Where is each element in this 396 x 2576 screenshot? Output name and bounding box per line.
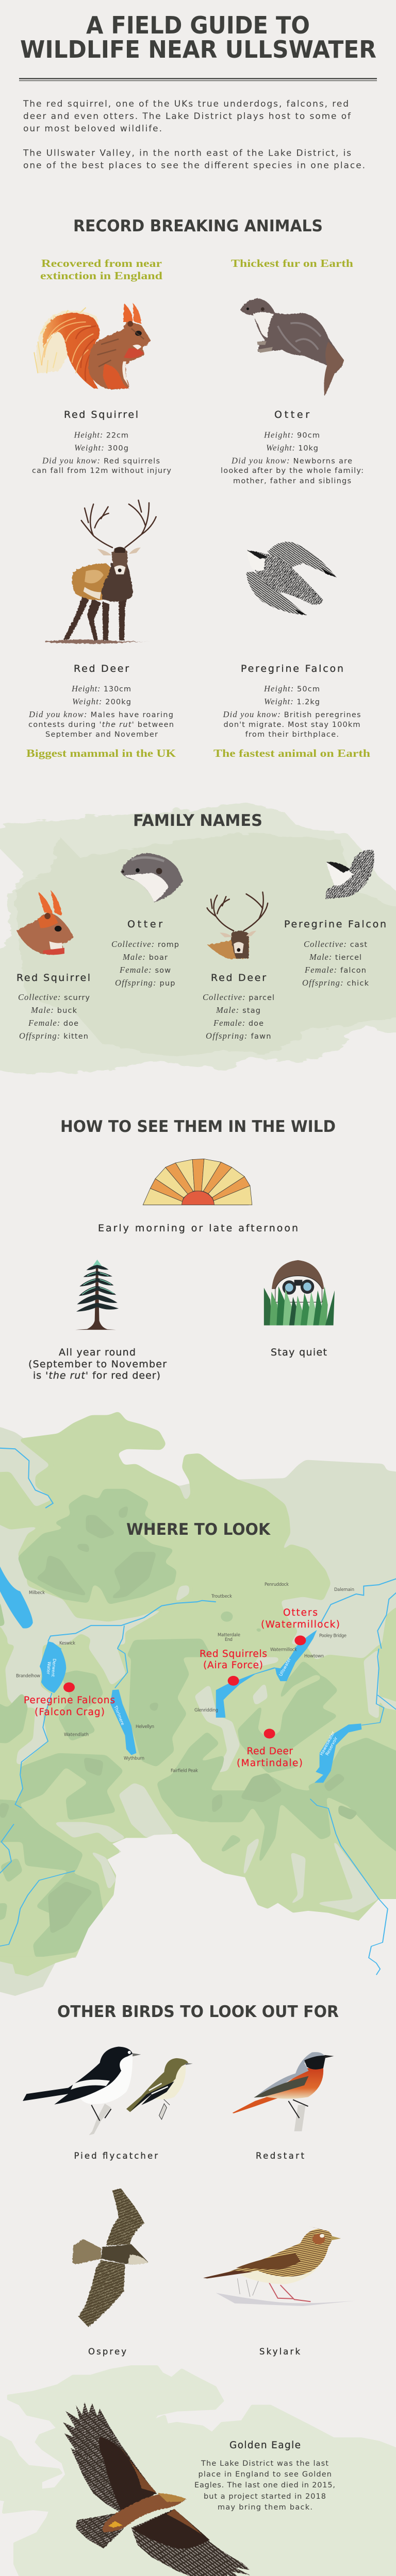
name: red squirrel: Red Squirrel	[64, 409, 138, 420]
facts	[111, 939, 179, 988]
facts: peregrine falcon	[223, 684, 361, 739]
name: otter: Otter	[274, 409, 309, 420]
marker: otters: Otters	[283, 1607, 318, 1618]
paper cut-out at the map's lower edge	[0, 1834, 396, 1984]
place names: Dalemain	[334, 1587, 354, 1592]
facts: red deer	[28, 684, 174, 739]
marker: red deer: (Martindale)	[237, 1758, 303, 1769]
lake names: Thirlmere	[113, 1704, 125, 1726]
label: Redstart	[256, 2151, 305, 2161]
place names: Pooley Bridge	[319, 1633, 346, 1638]
tip: early morning	[98, 1159, 298, 1234]
facts: otter: Height: 90cm	[263, 430, 320, 440]
place names: Brandelhow	[16, 1673, 40, 1679]
heading: other birds: OTHER BIRDS TO LOOK OUT FOR	[57, 2003, 339, 2021]
facts: peregrine falcon: Height: 50cm	[263, 684, 320, 693]
family: peregrine falcon	[284, 850, 386, 988]
icon: rising sun	[143, 1159, 252, 1205]
icon: person with binoculars in grass	[264, 1260, 335, 1325]
bird: redstart	[233, 2052, 334, 2161]
facts	[203, 992, 274, 1041]
lake names	[46, 1656, 339, 1756]
facts: red squirrel: Did you know: Red squirrels	[42, 455, 160, 466]
icon: pine tree	[75, 1260, 119, 1330]
family: otter	[111, 853, 183, 988]
description: but a project started in 2018	[204, 2493, 326, 2501]
caption: recovered from near extinction	[40, 257, 162, 282]
facts: Collective: cast	[304, 939, 367, 949]
label: Stay quiet	[271, 1347, 327, 1358]
panel: family names	[0, 804, 396, 1074]
name: red deer: Red Deer	[74, 663, 129, 674]
intro text: The red squirrel, one of the UKs true underdogs, falcons, red	[23, 99, 349, 109]
heading: family names: FAMILY NAMES	[133, 811, 262, 830]
illustration: skylark	[203, 2226, 355, 2306]
bird: osprey	[73, 2189, 148, 2357]
intro text: deer and even otters. The Lake District plays host to some of	[23, 111, 351, 122]
portrait: peregrine falcon	[325, 850, 374, 899]
facts: red deer: Weight: 200kg	[72, 697, 131, 706]
intro text: The Ullswater Valley, in the north east of the Lake District, is	[23, 148, 351, 159]
intro text	[23, 99, 365, 171]
facts: Male: buck	[30, 1005, 77, 1015]
facts: Collective: parcel	[203, 992, 274, 1002]
facts: Male: boar	[122, 952, 168, 962]
facts: red squirrel: Height: 22cm	[73, 430, 128, 440]
facts: red squirrel: can fall from 12m without injury	[32, 467, 171, 475]
facts: otter: Did you know: Newborns are	[231, 455, 352, 466]
facts: red deer: contests during 'the rut' between	[28, 721, 174, 729]
facts: red squirrel	[32, 430, 171, 475]
bird: skylark	[203, 2226, 355, 2357]
facts	[18, 992, 90, 1041]
panel: red squirrel	[32, 257, 171, 475]
tip: all year round	[28, 1260, 167, 1381]
facts: red squirrel: Weight: 300g	[74, 443, 128, 452]
place names: Troutbeck	[211, 1594, 232, 1599]
place names: Glenridding	[194, 1707, 218, 1713]
name: Red Deer	[211, 972, 266, 984]
illustration: osprey	[73, 2189, 148, 2327]
caption: biggest mammal: Biggest mammal in the UK	[26, 747, 176, 759]
lake names: Reservoir	[324, 1736, 339, 1756]
label: Skylark	[259, 2347, 300, 2357]
place names: Milbeck	[29, 1590, 45, 1595]
lake names: Haweswater	[319, 1730, 336, 1756]
facts: otter	[221, 430, 364, 485]
facts: Male: stag	[216, 1005, 260, 1015]
label: (September to November	[28, 1359, 167, 1370]
lake names: Ullswater	[278, 1656, 292, 1677]
label: Osprey	[88, 2347, 126, 2357]
name: Red Squirrel	[16, 972, 90, 984]
place names: Howtown	[304, 1653, 324, 1658]
label: Early morning or late afternoon	[98, 1223, 298, 1234]
intro text: one of the best places to see the different species in one place.	[23, 161, 365, 171]
title: A FIELD GUIDE TO	[86, 11, 310, 39]
place names	[16, 1582, 354, 1773]
facts: Female: doe	[213, 1018, 263, 1028]
label: is 'the rut' for red deer)	[33, 1370, 160, 1381]
caption: recovered from near extinction: extinction in England	[40, 269, 162, 282]
illustration: golden eagle	[63, 2402, 250, 2576]
facts: Female: sow	[119, 965, 171, 975]
facts: otter: Weight: 10kg	[266, 443, 318, 452]
marker: red deer	[237, 1729, 303, 1769]
intro text: our most beloved wildlife.	[23, 124, 162, 134]
place names: Watendlath	[64, 1732, 89, 1737]
facts	[302, 939, 369, 988]
description	[194, 2460, 335, 2512]
illustration: red squirrel	[34, 303, 151, 389]
marker: red squirrels: (Aira Force)	[203, 1660, 263, 1671]
marker: red squirrels	[200, 1649, 267, 1686]
portrait: red squirrel	[16, 890, 74, 955]
facts: Female: doe	[28, 1018, 78, 1028]
marker: red deer: Red Deer	[246, 1746, 293, 1757]
place names: Matterdale	[218, 1632, 240, 1637]
label	[28, 1347, 167, 1381]
label: All year round	[59, 1347, 136, 1358]
facts: peregrine falcon: Weight: 1.2kg	[264, 697, 320, 706]
rivers	[0, 1448, 396, 1975]
lake names: Water	[46, 1662, 52, 1675]
panel: red deer	[26, 500, 176, 759]
name: peregrine falcon: Peregrine Falcon	[241, 663, 343, 674]
caption: fastest animal: The fastest animal on Earth	[213, 747, 370, 759]
marker: otters: (Watermillock)	[261, 1619, 340, 1630]
facts: red deer: Did you know: Males have roaring	[28, 709, 173, 719]
facts: peregrine falcon: Did you know: British peregrines	[223, 709, 361, 719]
portrait: red deer	[207, 892, 268, 959]
illustration: red deer	[45, 500, 156, 643]
panel: otter	[221, 257, 364, 485]
panel: golden eagle	[0, 2366, 396, 2576]
background brush wash	[0, 804, 396, 1074]
label: Pied flycatcher	[74, 2151, 158, 2161]
marker: peregrine falcons: (Falcon Crag)	[35, 1707, 105, 1718]
background blob	[0, 2366, 396, 2576]
place names: Keswick	[59, 1640, 75, 1646]
illustration: otter	[240, 298, 344, 396]
name: Golden Eagle	[229, 2440, 301, 2451]
facts: Offspring: chick	[302, 978, 369, 988]
description: may bring them back.	[218, 2503, 312, 2512]
facts: otter: looked after by the whole family:	[221, 467, 364, 475]
panel: peregrine falcon	[213, 542, 370, 759]
description: place in England to see Golden	[198, 2470, 332, 2479]
place names: Wythburn	[124, 1756, 144, 1761]
place names: End	[225, 1637, 233, 1642]
illustration: pied flycatchers	[23, 2046, 193, 2135]
family: red squirrel	[16, 890, 90, 1041]
description: The Lake District was the last	[201, 2460, 328, 2468]
heading: how to see them in the wild: HOW TO SEE THEM IN THE WILD	[60, 1117, 336, 1136]
facts: peregrine falcon: don't migrate. Most stay 100km	[224, 721, 360, 729]
place names: Penruddock	[265, 1582, 289, 1587]
marker: peregrine falcons: Peregrine Falcons	[24, 1695, 115, 1706]
heading: where to look: WHERE TO LOOK	[126, 1520, 271, 1539]
caption: recovered from near extinction: Recovered from near	[41, 257, 162, 269]
facts: Female: falcon	[304, 965, 366, 975]
name: Peregrine Falcon	[284, 919, 386, 930]
title	[20, 11, 376, 63]
facts: Male: tiercel	[309, 952, 361, 962]
place names: Helvellyn	[136, 1724, 154, 1729]
facts: red deer: Height: 130cm	[71, 684, 131, 693]
map terrain	[0, 1411, 396, 1996]
caption: thickest fur: Thickest fur on Earth	[231, 257, 353, 269]
facts: red deer: September and November	[45, 731, 158, 739]
facts: Offspring: pup	[115, 978, 175, 988]
marker: otters	[261, 1607, 340, 1646]
heading: record breaking animals: RECORD BREAKING ANIMALS	[73, 217, 323, 235]
lakes	[0, 1564, 361, 1783]
portrait: otter	[121, 853, 183, 903]
title: WILDLIFE NEAR ULLSWATER	[20, 36, 376, 63]
illustration: peregrine falcon	[246, 542, 336, 615]
place names: Fairfield Peak	[171, 1768, 198, 1773]
panel: map	[0, 1411, 396, 1996]
facts: Offspring: kitten	[19, 1031, 88, 1041]
bird: pied flycatcher	[23, 2046, 193, 2161]
illustration: redstart	[233, 2052, 334, 2131]
name: Otter	[127, 919, 162, 930]
lake names: Derwent	[51, 1658, 57, 1677]
facts: peregrine falcon: from their birthplace.	[245, 731, 339, 739]
marker: red squirrels: Red Squirrels	[200, 1649, 267, 1659]
facts: otter: mother, father and siblings	[233, 477, 351, 485]
tip: stay quiet	[264, 1260, 335, 1358]
marker: peregrine falcons	[24, 1683, 115, 1718]
facts: Collective: romp	[111, 939, 179, 949]
description: Eagles. The last one died in 2015,	[194, 2481, 335, 2489]
place names: Watermillock	[270, 1647, 297, 1652]
family: red deer	[203, 892, 274, 1041]
facts: Collective: scurry	[18, 992, 90, 1002]
facts: Offspring: fawn	[206, 1031, 271, 1041]
